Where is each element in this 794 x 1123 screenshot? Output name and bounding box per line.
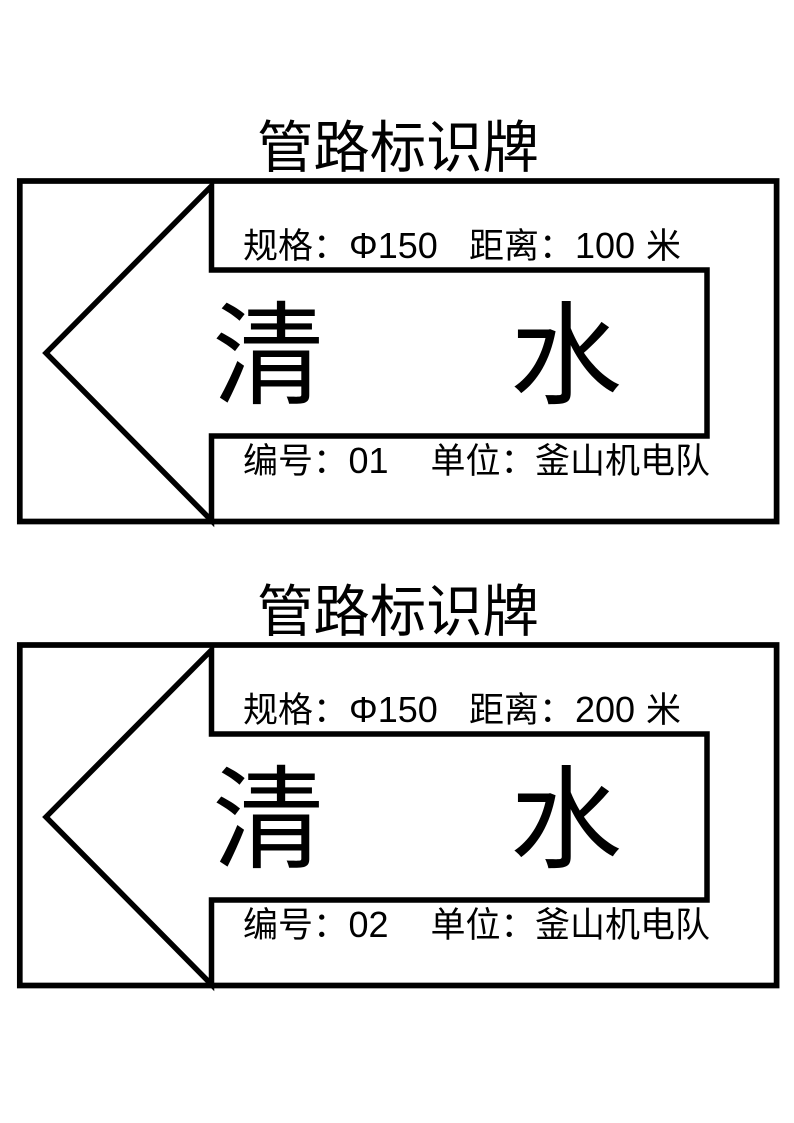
- arrow: sign 2 pointing left: [46, 650, 707, 984]
- text: sign 2 spec: 距离：: [469, 691, 574, 730]
- text: sign 2 medium left character: 清: [212, 758, 324, 883]
- text: sign 2 number and unit: 单位：: [430, 906, 536, 945]
- text: sign 1 number and unit: 01: [348, 440, 389, 481]
- text: sign 1 spec: 规格：: [243, 227, 348, 266]
- text: sign 2 spec: 米: [646, 691, 681, 730]
- text: sign 1 medium right character: 水: [510, 294, 622, 419]
- text: sign 2 spec: 200: [575, 689, 635, 730]
- text: sign 1 spec: [243, 225, 681, 266]
- text: sign 1 number and unit: [243, 440, 710, 481]
- text: sign 1 number and unit: 单位：: [430, 442, 536, 481]
- sign 1: [20, 116, 777, 522]
- panel: sign 1 outer frame: [20, 181, 777, 522]
- arrow: sign 1 pointing left: [46, 186, 707, 520]
- text: sign 1 number and unit: 釜山机电队: [535, 442, 710, 481]
- text: sign 1 spec: 距离：: [469, 227, 574, 266]
- text: sign 1 spec: Φ150: [349, 225, 438, 266]
- text: sign 1 spec: 米: [646, 227, 681, 266]
- sign 2: [20, 580, 777, 986]
- text: sign 2 number and unit: 釜山机电队: [535, 906, 710, 945]
- text: sign 2 number and unit: 02: [348, 904, 389, 945]
- text: sign 2 spec: 规格：: [243, 691, 348, 730]
- text: sign 2 medium right character: 水: [510, 758, 622, 883]
- text: sign 2 spec: Φ150: [349, 689, 438, 730]
- title: sign 1: 管路标识牌: [257, 116, 539, 179]
- text: sign 1 spec: 100: [575, 225, 635, 266]
- text: sign 2 number and unit: [243, 904, 710, 945]
- text: sign 2 spec: [243, 689, 681, 730]
- title: sign 2: 管路标识牌: [257, 580, 539, 643]
- panel: sign 2 outer frame: [20, 645, 777, 986]
- text: sign 2 number and unit: 编号：: [243, 906, 348, 945]
- text: sign 1 medium left character: 清: [212, 294, 324, 419]
- text: sign 1 number and unit: 编号：: [243, 442, 348, 481]
